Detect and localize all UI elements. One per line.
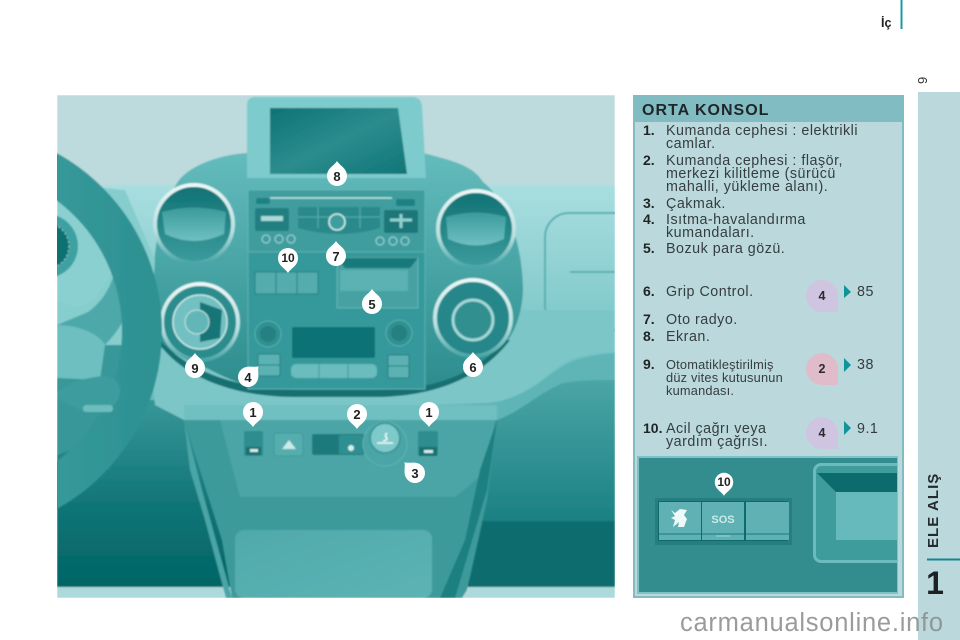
- list items 1 to 5: 2.: [643, 152, 655, 168]
- list items 1 to 5: Kumanda cephesi : flaşör,: [666, 153, 843, 169]
- reference badge: chapter 4, page 9.1: 4: [819, 426, 826, 440]
- callout pins: 9: [191, 361, 199, 376]
- list items 1 to 5: merkezi kilitleme (sürücü: [666, 166, 836, 182]
- list items 1 to 5: kumandaları.: [666, 225, 755, 241]
- screen housing: [247, 97, 426, 178]
- list items 1 to 5: camlar.: [666, 136, 716, 152]
- list items 6 to 10: 7.: [643, 311, 655, 327]
- list items 1 to 5: [643, 122, 858, 257]
- stalk control: [86, 376, 120, 406]
- panel heading: ORTA KONSOL: [642, 102, 769, 119]
- list items 1 to 5: mahalli, yükleme alanı).: [666, 179, 828, 195]
- console hood: [153, 153, 523, 394]
- icon: lion: [671, 509, 687, 527]
- page number: 9: [915, 77, 930, 84]
- gear knob: [162, 284, 238, 360]
- lower panel: [248, 252, 425, 389]
- callout pins: 2: [353, 407, 361, 422]
- list items 1 to 5: Bozuk para gözü.: [666, 241, 785, 257]
- list items 1 to 5: 1.: [643, 122, 655, 138]
- callout pins: 10: [281, 251, 295, 265]
- reference badge: chapter 2, page 38: [806, 353, 874, 385]
- left air vent: [155, 185, 233, 263]
- list items 1 to 5: 5.: [643, 240, 655, 256]
- switch panel items: [244, 431, 263, 456]
- reference badge: chapter 4, page 85: [806, 280, 874, 312]
- callout pins: 4: [244, 370, 252, 385]
- callout pins: [185, 161, 483, 487]
- watermark: carmanualsonline.info: [680, 609, 944, 637]
- list items 1 to 5: Kumanda cephesi : elektrikli: [666, 123, 858, 139]
- callout pins: 1: [425, 405, 433, 420]
- climate knob: [435, 280, 511, 356]
- list items 6 to 10: yardım çağrısı.: [666, 434, 768, 450]
- reference badge: chapter 4, page 85: 4: [819, 289, 826, 303]
- inset: SOS button detail: 10: [717, 475, 731, 489]
- list items 6 to 10: düz vites kutusunun: [666, 370, 783, 385]
- list items 6 to 10: Grip Control.: [666, 284, 754, 300]
- reference badge: chapter 4, page 85: 85: [857, 284, 874, 300]
- list items 6 to 10: kumandası.: [666, 383, 734, 398]
- list items 6 to 10: Ekran.: [666, 329, 710, 345]
- reference badge: chapter 4, page 9.1: [806, 417, 878, 449]
- list items 1 to 5: Çakmak.: [666, 196, 726, 212]
- glovebox outline: [544, 211, 615, 332]
- list items 1 to 5: Isıtma-havalandırma: [666, 212, 806, 228]
- centre lower column: [184, 420, 497, 598]
- callout pins: 8: [333, 169, 341, 184]
- header label: İç: [881, 15, 891, 30]
- callout pins: 5: [368, 297, 376, 312]
- list items 6 to 10: Otomatikleştirilmiş: [666, 357, 774, 372]
- lower footwell: [57, 400, 472, 588]
- inset: SOS button detail: [637, 456, 916, 594]
- lower trim bands: [150, 310, 615, 420]
- list items 1 to 5: 3.: [643, 195, 655, 211]
- list items 1 to 5: 4.: [643, 211, 655, 227]
- radio panel: [248, 190, 425, 252]
- sidebar: [918, 92, 960, 640]
- inset: SOS button detail: SOS: [711, 514, 735, 526]
- callout pins: 1: [249, 405, 257, 420]
- list items 6 to 10: 10.: [643, 420, 662, 436]
- illustration: dashboard centre console: [57, 95, 615, 598]
- right air vent: [438, 191, 514, 267]
- reference badge: chapter 4, page 9.1: 9.1: [857, 421, 878, 437]
- list items 6 to 10: [643, 283, 783, 450]
- list items 6 to 10: Oto radyo.: [666, 312, 738, 328]
- header label: [881, 0, 902, 30]
- reference badge: chapter 2, page 38: 2: [819, 362, 826, 376]
- steering wheel: [57, 344, 122, 455]
- callout pins: 6: [469, 360, 477, 375]
- callout pins: 7: [332, 249, 340, 264]
- chapter title: ELE ALIŞ: [925, 473, 942, 548]
- panel: orta konsol: [633, 95, 916, 597]
- reference badge: chapter 2, page 38: 38: [857, 357, 874, 373]
- callout pins: 3: [411, 466, 419, 481]
- chapter number: 1: [926, 565, 944, 601]
- panel heading: [633, 95, 904, 122]
- list items 6 to 10: Acil çağrı veya: [666, 421, 766, 437]
- list items 6 to 10: 9.: [643, 356, 655, 372]
- list items 6 to 10: 6.: [643, 283, 655, 299]
- list items 6 to 10: 8.: [643, 328, 655, 344]
